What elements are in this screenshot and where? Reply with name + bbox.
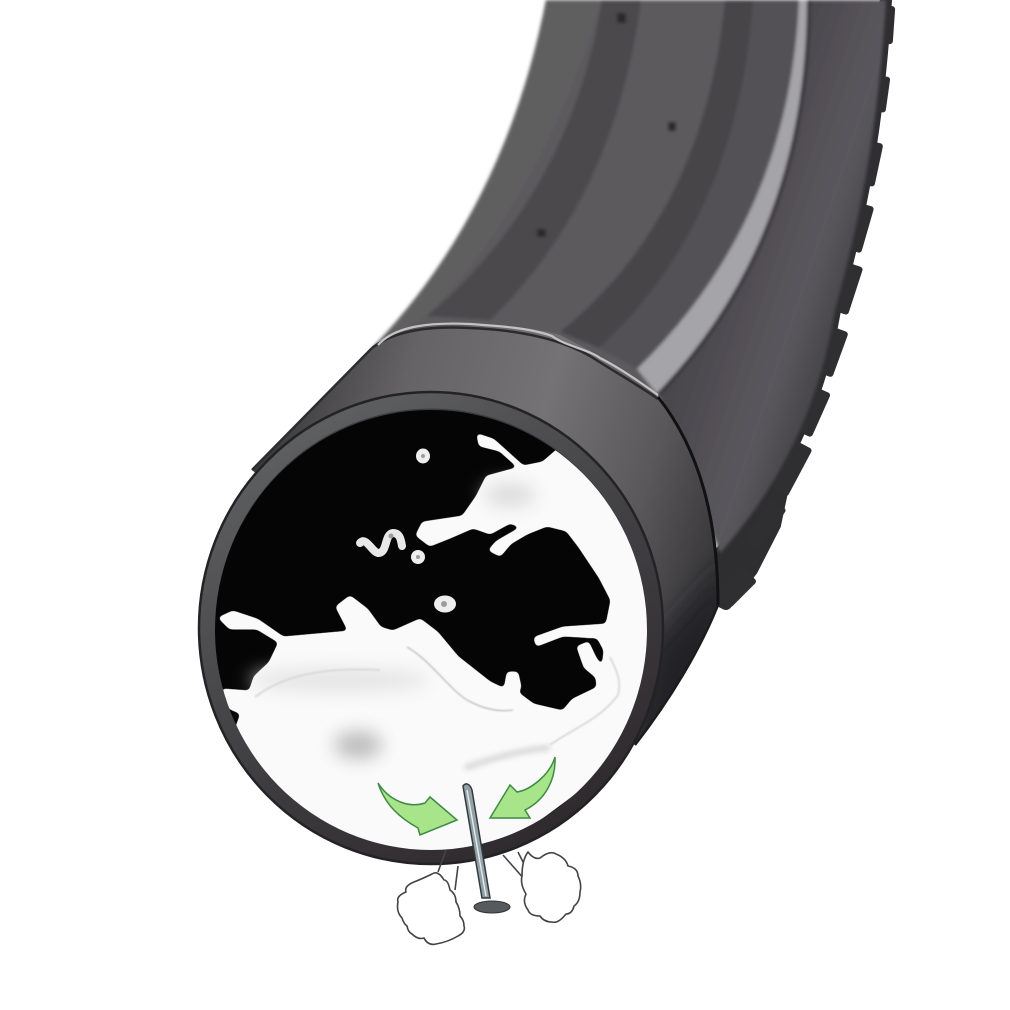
collar lower right edge [635, 605, 718, 745]
tyre body with sidewall bands [372, 0, 886, 553]
collar top seam shadow [372, 328, 658, 399]
dark interior [215, 410, 647, 850]
sleeve collar [252, 326, 718, 745]
light stripe [637, 0, 809, 395]
tube opening [215, 410, 647, 850]
sealant splash [220, 434, 647, 850]
sidewall dots [537, 13, 676, 237]
nail shaft [463, 784, 490, 898]
tyre tread band [718, 0, 886, 604]
ring dark outline [199, 392, 663, 864]
outer sidewall [658, 0, 886, 553]
collar lower right shade [634, 574, 716, 745]
nail head [474, 901, 510, 913]
band beside stripe [599, 0, 799, 369]
dark band one [427, 0, 641, 320]
inner lighter strip [372, 0, 602, 348]
sealant shading [250, 483, 619, 768]
illustration: tyre cross-section with sealant [198, 0, 896, 946]
sealant droplets [360, 448, 456, 612]
tube backing [207, 401, 655, 857]
escaping air puff left [398, 873, 464, 944]
dark band two [560, 0, 753, 348]
dark line beside stripe [658, 0, 809, 395]
air puff connecting strokes [438, 850, 528, 890]
collar top seam highlight [378, 324, 658, 395]
collar left edge [252, 348, 372, 470]
tyre tread knobs [715, 6, 895, 608]
green arrow left [378, 783, 457, 835]
inner sidewall base [372, 0, 809, 397]
nail highlight [467, 790, 486, 896]
escaping air puff right [522, 852, 581, 922]
collar right seam [658, 397, 718, 605]
green arrow right [490, 757, 555, 818]
droplet centres [388, 454, 447, 607]
nail [463, 784, 510, 913]
tube rim ring [207, 400, 655, 856]
